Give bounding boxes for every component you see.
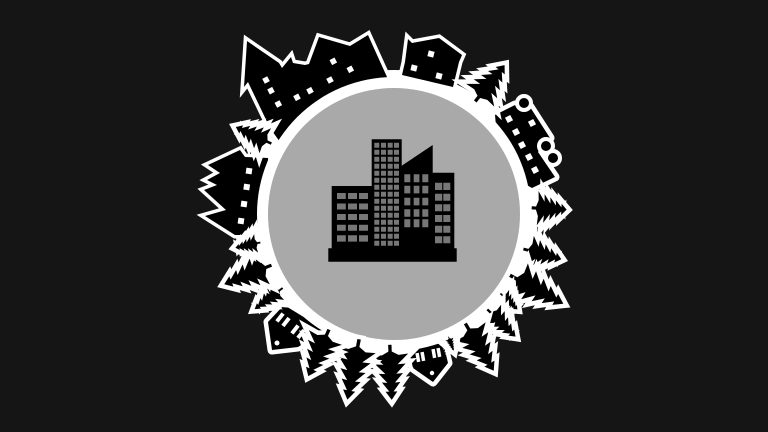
building: upper right with round towers	[495, 96, 560, 188]
tree: right	[531, 191, 568, 227]
tree: left tiny	[233, 233, 262, 257]
tree: small beside bottom house	[444, 335, 458, 352]
house: top	[402, 38, 462, 87]
tree: upper left	[230, 115, 277, 156]
tree: small right	[495, 287, 523, 316]
windows: right building	[435, 183, 450, 243]
windows: tower	[374, 143, 399, 246]
tree: right lower	[519, 234, 565, 274]
gray disc	[268, 88, 520, 340]
building: left jagged	[204, 150, 275, 235]
house: bottom	[409, 342, 448, 382]
tree: left small	[248, 280, 289, 317]
building: large skyline upper left	[244, 35, 387, 170]
tree: upper right	[461, 54, 519, 113]
windows: slanted building	[404, 174, 428, 227]
trees around the ring	[218, 54, 572, 403]
windows: left building	[337, 193, 368, 242]
icon: central city buildings	[328, 139, 457, 262]
house: lower left	[268, 305, 325, 350]
white backing ring behind trees and buildings	[250, 70, 538, 358]
tree: bottom left	[292, 322, 345, 383]
tree: large right	[501, 259, 572, 320]
tree: lower right	[478, 300, 525, 346]
white ring	[257, 77, 531, 351]
tree: bottom	[372, 344, 410, 401]
tree: bottom left large	[329, 336, 378, 403]
building silhouettes	[328, 139, 457, 262]
tree: left	[218, 249, 278, 300]
icon: round towers	[517, 96, 560, 165]
tree: lower right large	[450, 314, 509, 380]
